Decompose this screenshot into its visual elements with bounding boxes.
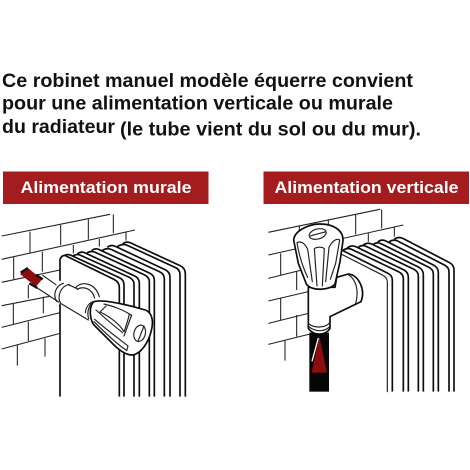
brick wall — [2, 214, 135, 366]
valve body — [308, 274, 363, 334]
icon: red pipe end — [20, 268, 43, 288]
banner: Alimentation verticale — [264, 172, 469, 204]
heading text: pour une alimentation verticale ou murale — [2, 92, 393, 114]
valve knob — [294, 224, 343, 289]
banner: Alimentation verticale: Alimentation verticale — [274, 178, 458, 197]
radiator — [341, 237, 454, 393]
heading text: Ce robinet manuel modèle équerre convient — [2, 70, 413, 92]
heading text: (le tube vient du sol ou du mur). — [120, 120, 421, 140]
banner: Alimentation murale — [3, 172, 208, 204]
valve knob — [85, 301, 152, 355]
heading text — [2, 70, 421, 140]
banner: Alimentation murale: Alimentation murale — [20, 178, 192, 197]
black pipe with red arrow — [309, 333, 329, 392]
brick wall — [268, 209, 403, 361]
valve pipe and body — [37, 275, 100, 321]
illustration: wall-fed radiator valve — [2, 214, 185, 397]
radiator — [60, 242, 185, 397]
illustration: floor-fed radiator valve — [268, 209, 454, 393]
heading text: du radiateur — [2, 116, 115, 138]
